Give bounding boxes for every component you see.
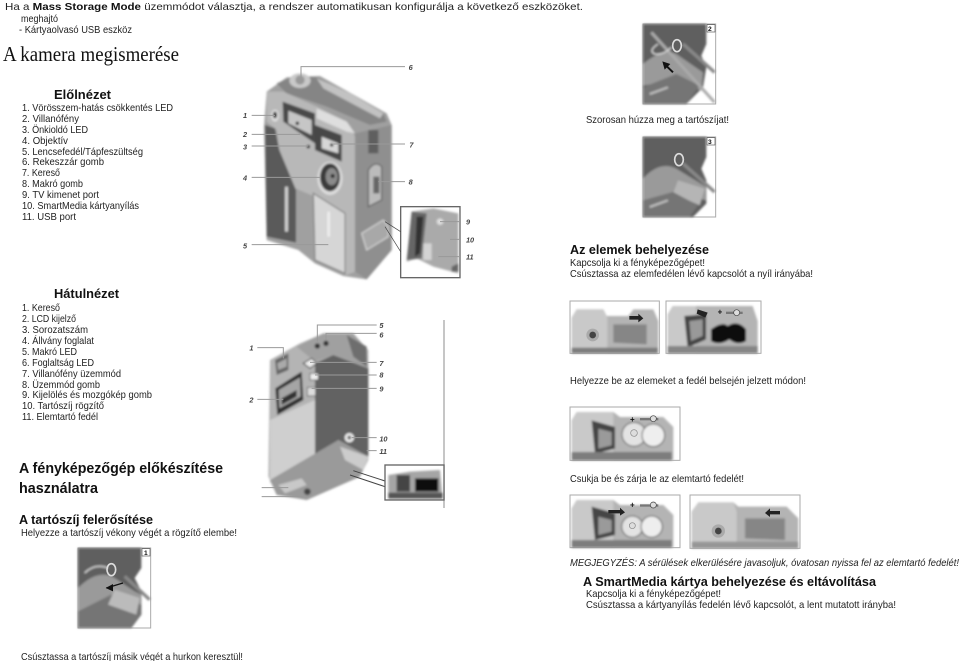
leader lines and numbers: 7 [409, 140, 414, 149]
leader lines and numbers: 5 [243, 242, 248, 251]
leader lines and numbers: 4 [242, 173, 247, 182]
inset: battery door [385, 465, 444, 500]
leader lines and numbers: 11 [466, 253, 474, 262]
text: SmartMedia instructions: Kapcsolja ki a fényképezőgépet! [586, 588, 721, 600]
text: SmartMedia instructions: Csúsztassa a kártyanyílás fedelén lévő kapcsolót, a lent mutatott irányba! [586, 599, 896, 611]
illustration: camera back view [248, 320, 444, 508]
text: close cover: Csukja be és zárja le az elemtartó fedelét! [570, 473, 744, 485]
illustration: strap step 1 [78, 548, 151, 628]
list: back view parts: 9. Kijelölés és mozgókép gomb [22, 389, 152, 401]
illustration: camera back view: 6 [379, 330, 384, 339]
illustration: camera back view: 10 [379, 434, 387, 443]
list: front view parts: 10. SmartMedia kártyanyílás [22, 200, 139, 212]
list: front view parts: 5. Lencsefedél/Tápfeszültség [22, 146, 143, 158]
illustration: camera back view: 8 [379, 370, 384, 379]
intro text: Ha a Mass Storage Mode üzemmódot választja, a rendszer automatikusan konfigurálja a következő eszközöket. [5, 1, 583, 13]
illustration: camera back view: 7 [379, 359, 384, 368]
heading: preparing the camera [19, 461, 223, 497]
heading: preparing the camera: használatra [19, 481, 99, 497]
heading: attaching the strap: A tartószíj felerősítése [19, 513, 153, 527]
illustration: camera back view: 9 [379, 384, 384, 393]
heading: front view: Előlnézet [54, 88, 112, 102]
list: back view parts: 4. Állvány foglalat [22, 334, 94, 347]
leader lines and numbers: 10 [466, 236, 474, 245]
illustration: strap step 2 [643, 24, 716, 104]
list: front view parts [22, 102, 173, 223]
illustration: camera back view: 1 [249, 344, 253, 353]
inset: port detail [385, 207, 460, 278]
heading: inserting batteries: Az elemek behelyezése [570, 243, 709, 257]
illustration: camera back view: 5 [379, 321, 384, 330]
leader lines and numbers: 3 [243, 142, 247, 151]
illustration: camera front view [242, 63, 474, 279]
list: front view parts: 11. USB port [22, 211, 76, 223]
list: front view parts: 4. Objektív [22, 135, 69, 147]
heading: back view: Hátulnézet [54, 287, 120, 301]
illustration: closed battery cover, slide left [690, 495, 800, 548]
leader lines and numbers: 9 [466, 218, 471, 227]
list: front view parts: 1. Vörösszem-hatás csökkentés LED [22, 102, 173, 114]
step number: 2 [708, 26, 712, 33]
text: insert batteries: Helyezze be az elemeket a fedél belsején jelzett módon! [570, 375, 806, 387]
text: battery instructions [570, 257, 813, 280]
list: back view parts: 10. Tartószíj rögzítő [22, 400, 104, 412]
illustration: open battery compartment: + [718, 307, 723, 316]
intro text [5, 1, 583, 36]
list: front view parts: 8. Makró gomb [22, 178, 83, 190]
text: strap step 1: Helyezze a tartószíj vékony végét a rögzítő elembe! [21, 527, 237, 539]
list: back view parts: 7. Villanófény üzemmód [22, 368, 121, 380]
illustration: batteries inserted [570, 407, 680, 460]
illustration: closing battery cover [570, 495, 680, 548]
step number: 1 [144, 550, 148, 557]
intro text: - Kártyaolvasó USB eszköz [19, 24, 132, 36]
illustration: strap step 3 [643, 137, 716, 217]
list: front view parts: 7. Kereső [22, 167, 60, 179]
list: front view parts: 9. TV kimenet port [22, 189, 99, 201]
list: back view parts: 8. Üzemmód gomb [22, 379, 100, 391]
illustration: camera back view: 11 [379, 447, 387, 456]
illustration: closed battery cover, slide right [570, 301, 659, 353]
list: back view parts: 11. Elemtartó fedél [22, 411, 98, 423]
list: front view parts: 6. Rekeszzár gomb [22, 156, 104, 168]
intro text: meghajtó [21, 13, 58, 25]
illustration: closing battery cover: + [630, 501, 635, 510]
list: back view parts: 3. Sorozatszám [22, 324, 88, 336]
list: back view parts: 2. LCD kijelző [22, 313, 76, 325]
leader lines and numbers: 6 [409, 63, 414, 72]
leader lines and numbers: 1 [243, 111, 247, 120]
list: back view parts: 1. Kereső [22, 302, 60, 314]
heading: SmartMedia card: A SmartMedia kártya behelyezése és eltávolítása [583, 575, 877, 589]
list: back view parts [22, 302, 152, 423]
list: back view parts: 5. Makró LED [22, 346, 77, 358]
illustration: batteries inserted: + [630, 415, 635, 424]
text: SmartMedia instructions [586, 588, 896, 611]
list: front view parts: 2. Villanófény [22, 113, 80, 125]
text: battery instructions: Csúsztassa az elemfedélen lévő kapcsolót a nyíl irányába! [570, 268, 813, 280]
title: A kamera megismerése [3, 42, 179, 66]
text: battery instructions: Kapcsolja ki a fényképezőgépet! [570, 257, 705, 269]
step number: 3 [708, 139, 712, 146]
text: strap step 3: Szorosan húzza meg a tartószíjat! [586, 114, 729, 126]
illustration: open battery compartment [666, 301, 761, 353]
leader lines and numbers: 2 [242, 130, 247, 139]
leader lines and numbers: 8 [409, 178, 414, 187]
heading: preparing the camera: A fényképezőgép előkészítése [19, 461, 223, 477]
illustration: camera back view: 2 [248, 395, 253, 404]
leader lines and numbers [242, 63, 474, 262]
list: front view parts: 3. Önkioldó LED [22, 124, 88, 136]
list: back view parts: 6. Foglaltság LED [22, 357, 94, 369]
